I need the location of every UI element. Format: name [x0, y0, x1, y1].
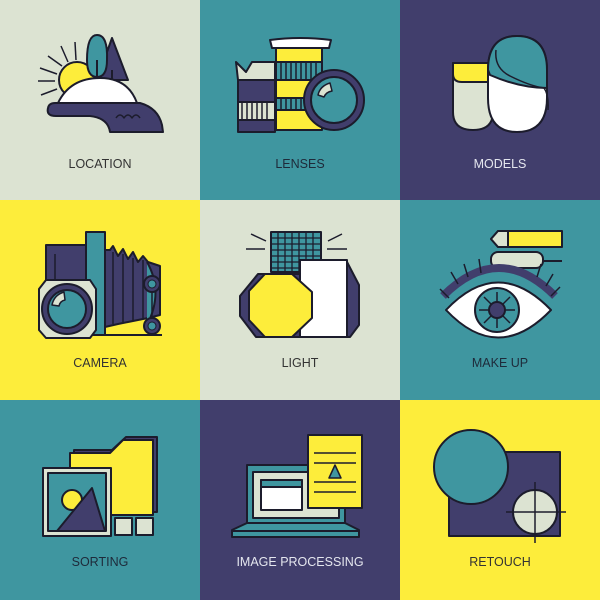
label: sorting: SORTING [72, 555, 128, 569]
label: image processing: IMAGE PROCESSING [236, 555, 364, 569]
panel: light [200, 200, 400, 400]
panel: sorting [0, 400, 200, 600]
icon: laptop with document [232, 435, 362, 537]
label: camera: CAMERA [73, 356, 127, 370]
icon: folder and photo [43, 437, 157, 536]
panel: camera [0, 200, 200, 400]
panel: make up [400, 200, 600, 400]
panel: image processing [200, 400, 400, 600]
icon: lenses [236, 38, 364, 132]
icon: landscape [38, 35, 163, 132]
icon: eye with makeup [440, 231, 562, 338]
label: lenses: LENSES [275, 157, 325, 171]
icon: light [240, 232, 359, 337]
label: make up: MAKE UP [472, 356, 528, 370]
panel: models [400, 0, 600, 200]
label: location: LOCATION [69, 157, 131, 171]
panel: lenses [200, 0, 400, 200]
icon: retouch shapes [434, 430, 566, 543]
icon: camera [39, 232, 162, 338]
panel: location [0, 0, 200, 200]
label: light: LIGHT [282, 356, 319, 370]
panel: retouch [400, 400, 600, 600]
icon: models [453, 36, 548, 132]
label: retouch: RETOUCH [469, 555, 531, 569]
label: models: MODELS [474, 157, 526, 171]
